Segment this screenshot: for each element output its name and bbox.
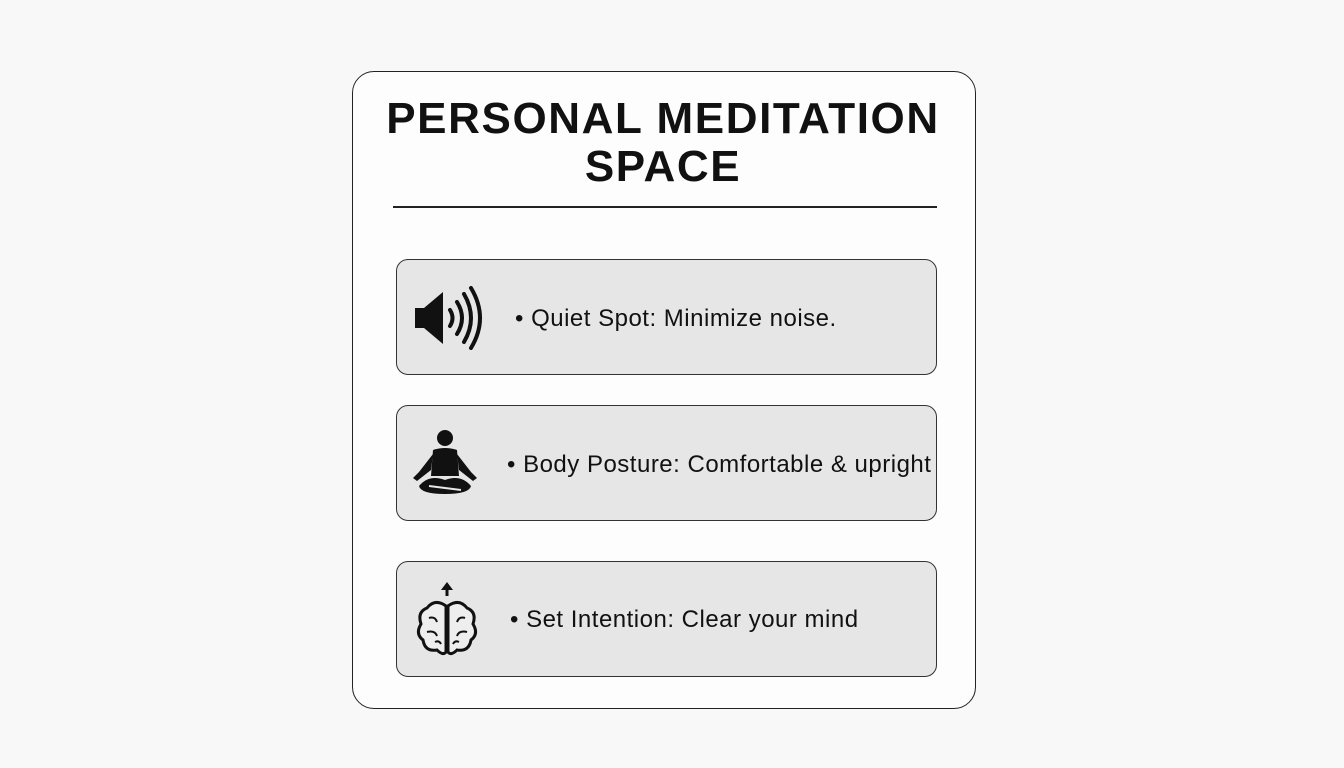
- panel: card: [352, 71, 976, 709]
- title: SPACE: [585, 142, 741, 191]
- title: PERSONAL MEDITATION: [386, 94, 940, 143]
- panel: set intention: [396, 561, 937, 677]
- text: quiet spot: • Quiet Spot: Minimize noise.: [515, 305, 837, 332]
- icon: brain with arrow: [416, 582, 478, 656]
- icon: meditating person: [413, 430, 477, 494]
- text: body posture: • Body Posture: Comfortable & upright: [507, 451, 931, 478]
- icon: speaker: [415, 286, 482, 350]
- panel: quiet spot: [396, 259, 937, 375]
- panel: body posture: [396, 405, 937, 521]
- text: set intention: • Set Intention: Clear your mind: [510, 606, 859, 633]
- title: [386, 94, 940, 191]
